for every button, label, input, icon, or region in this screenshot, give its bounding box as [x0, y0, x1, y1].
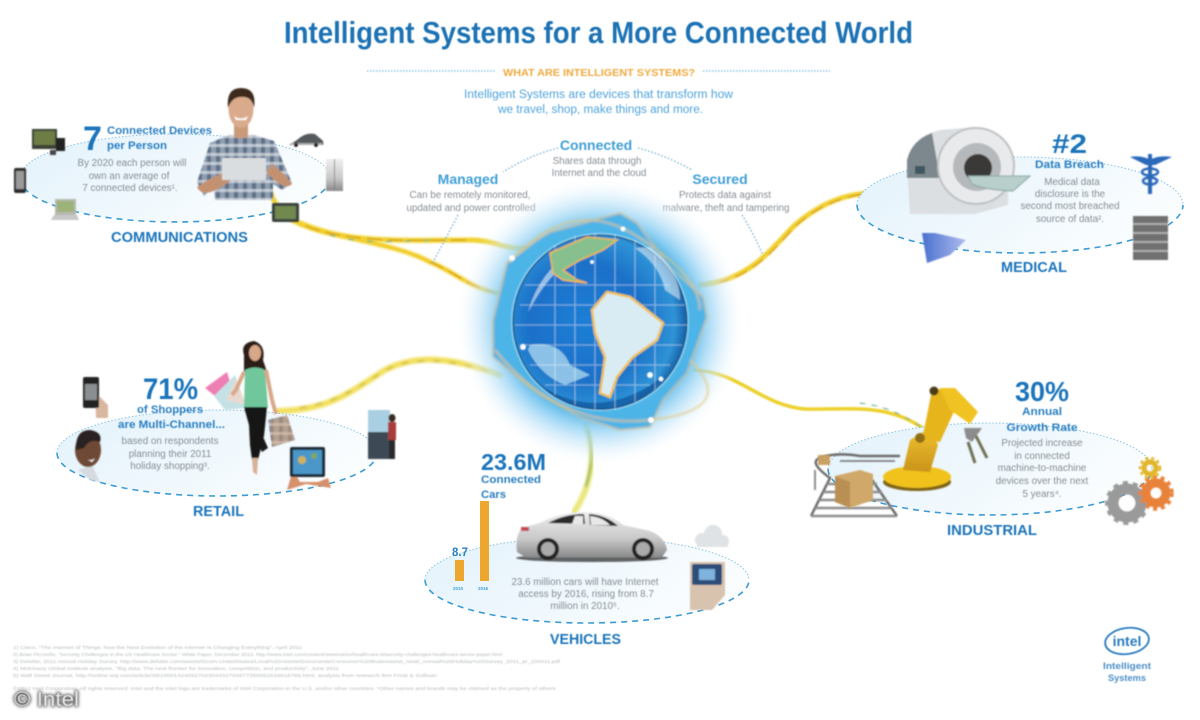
bar chart: connected cars	[452, 501, 489, 591]
text: industrial body	[996, 438, 1089, 500]
text: vehicles body: million in 2010⁵.	[550, 601, 620, 612]
globe outer bands	[493, 213, 708, 430]
feature: connected: Shares data through	[553, 156, 641, 167]
stat: 30 percent: 30%	[1015, 376, 1069, 407]
panel: managed connected secured	[406, 137, 789, 264]
label: of shoppers are multi-channel: are Multi-Channel...	[118, 419, 225, 431]
panel: medical	[857, 127, 1183, 276]
heading: industrial: INDUSTRIAL	[947, 523, 1037, 539]
stat: 7 connected devices: 7	[83, 120, 102, 158]
feature: secured: Protects data against	[679, 190, 771, 201]
feature: connected	[552, 137, 646, 179]
label: connected devices per person	[107, 125, 212, 152]
stat: 71 percent: 71%	[143, 373, 198, 406]
globe grid lines	[515, 234, 688, 410]
label: connected devices per person: Connected Devices	[107, 125, 212, 137]
icon: server stack	[1133, 216, 1168, 260]
text: retail body: based on respondents	[122, 436, 219, 447]
icon: laptop	[51, 199, 79, 220]
icon: phone in hand	[83, 377, 108, 418]
text: communications body: By 2020 each person will	[78, 158, 186, 169]
text: vehicles body: 23.6 million cars will have Internet	[511, 577, 659, 588]
text: communications body: 7 connected devices¹.	[82, 183, 178, 194]
bar: 2010	[455, 560, 464, 581]
panel: communications	[14, 88, 525, 293]
globe	[455, 177, 745, 467]
footnotes: ©2012 Intel Corporation. All rights reserved. Intel and the Intel logo are trademarks of Intel Corporation in the U.S. and/or other countries. *Other names and brands may be claimed as the property of others.	[13, 685, 557, 691]
text: medical body: disclosure is the	[1035, 189, 1106, 200]
feature: managed: Can be remotely monitored,	[410, 190, 530, 201]
icon: tablet device	[272, 203, 299, 222]
text: industrial body: Projected increase	[1001, 438, 1083, 449]
label: of shoppers are multi-channel: of Shoppers	[137, 404, 203, 416]
text: vehicles body: access by 2016, rising from 8.7	[518, 589, 654, 600]
person: man with tablet	[197, 88, 292, 200]
feature: managed	[406, 171, 536, 214]
footnotes	[13, 645, 561, 691]
title: Intelligent Systems for a More Connected World	[284, 15, 913, 50]
footnotes: 2) Brian Piccirello, "Security Challenges in the US Healthcare Sector," White Paper, December 2012. http://www.intel.com/content/www/us/en/healthcare-it/security-challenges-healthcare-sector-paper.html	[13, 652, 502, 657]
intro: what are intelligent systems: we travel, shop, make things and more.	[497, 104, 703, 116]
label: data breach: Data Breach	[1035, 159, 1104, 171]
heading: communications: COMMUNICATIONS	[111, 230, 248, 246]
icon: car small	[289, 134, 323, 147]
feature: secured: malware, theft and tampering	[663, 203, 789, 214]
text: communications body	[78, 158, 186, 194]
watermark: copyright intel: © Intel	[14, 689, 79, 711]
ribbon: vehicles to globe	[574, 425, 591, 512]
icon: robot arm	[883, 386, 987, 491]
ribbon: medical to globe	[700, 192, 905, 285]
value: 8.7: 8.7	[452, 545, 468, 559]
stat: number 2: #2	[1052, 129, 1087, 159]
icon: caduceus	[1130, 154, 1172, 194]
feature: managed: Managed	[438, 171, 498, 187]
ribbon: retail to globe	[278, 360, 500, 411]
intro: what are intelligent systems	[367, 67, 830, 116]
heading: medical: MEDICAL	[1001, 260, 1067, 276]
ribbon: industrial to globe	[694, 370, 928, 432]
icon: cardboard box	[818, 455, 873, 508]
text: medical body	[1020, 177, 1120, 225]
icon: gears	[1107, 458, 1172, 523]
continent: north america	[550, 237, 617, 283]
axis labels	[453, 586, 489, 591]
feature: managed: updated and power controlled	[406, 203, 536, 214]
footnotes: 4) McKinsey Global Institute analysis, "Big data: The next frontier for innovation, competition, and productivity", June 2011	[13, 666, 340, 671]
text: industrial body: 5 years⁴.	[1022, 489, 1062, 500]
bar: 2016	[480, 501, 489, 581]
icon: folder	[922, 233, 966, 263]
text: industrial body: devices over the next	[996, 476, 1089, 487]
text: industrial body: in connected	[1014, 451, 1070, 462]
label: connected cars: Connected	[481, 474, 541, 486]
text: medical body: second most breached	[1020, 201, 1120, 212]
ellipse: retail	[57, 410, 377, 496]
heading: vehicles: VEHICLES	[550, 632, 621, 648]
text: retail body: planning their 2011	[129, 449, 211, 460]
heading: retail: RETAIL	[193, 504, 244, 520]
footnotes: 3) Deloitte, 2011 Annual Holiday Survey. http://www.deloitte.com/assets/Dcom-UnitedStates/Local%20Assets/Documents/Consumer%20Business/us_retail_Annual%20Holiday%20Survey_2011_pr_100411.pdf	[13, 659, 561, 664]
continent: south america	[592, 292, 663, 397]
panel: vehicles	[425, 449, 749, 648]
ellipse: vehicles	[425, 537, 749, 623]
logo: intel intelligent systems: intel	[1113, 633, 1141, 649]
text: retail body	[122, 436, 219, 472]
label: annual growth rate: Growth Rate	[1006, 422, 1078, 434]
feature: secured	[663, 171, 789, 214]
icon: digital kiosk	[368, 410, 396, 459]
label: connected cars: Cars	[481, 489, 506, 501]
intro: what are intelligent systems: WHAT ARE INTELLIGENT SYSTEMS?	[503, 67, 695, 79]
ribbon: communications to globe	[270, 192, 525, 293]
icon: silver car	[516, 512, 668, 562]
globe sparkles	[509, 226, 664, 423]
logo: intel intelligent systems: Intelligent	[1103, 661, 1151, 671]
text: retail body: holiday shopping³.	[130, 461, 210, 472]
ellipse: industrial	[828, 423, 1152, 515]
panel: retail	[57, 341, 396, 520]
text: medical body: Medical data	[1044, 177, 1100, 188]
icon: conveyor belt	[811, 454, 900, 516]
label: annual growth rate	[1006, 406, 1078, 434]
icon: television	[32, 129, 65, 155]
globe halo	[455, 177, 745, 467]
icon: mri scanner	[907, 127, 1030, 214]
logo: intel intelligent systems: Systems	[1108, 673, 1146, 683]
label: of shoppers are multi-channel	[118, 404, 225, 431]
label: annual growth rate: Annual	[1022, 406, 1062, 418]
logo: intel intelligent systems	[1103, 625, 1151, 683]
panel: industrial	[811, 376, 1172, 539]
watermark: copyright intel: © Intel	[14, 689, 79, 711]
feature: secured: Secured	[692, 171, 748, 187]
icon: in-car screen	[690, 562, 725, 610]
text: industrial body: machine-to-machine	[998, 463, 1087, 474]
person: woman shopper	[205, 341, 295, 475]
footnotes: 5) Wall Street Journal, http://online.wsj.com/article/SB10001424052702304432704577350052534616786.html, analysis from research firm Frost & Sullivan	[13, 673, 438, 678]
ellipse: communications	[20, 134, 330, 222]
axis labels: 2016	[478, 586, 489, 591]
icon: cloud	[695, 525, 729, 547]
text: communications body: own an average of	[89, 171, 170, 182]
axis labels: 2010	[453, 586, 464, 591]
stat: 23.6M: 23.6M	[481, 449, 546, 475]
ellipse: medical	[857, 157, 1183, 253]
footnotes: 1) Cisco, "The Internet of Things: how the Next Evolution of the Internet Is Changing Everything", April 2011	[13, 645, 303, 650]
label: connected devices per person: per Person	[107, 140, 167, 152]
feature: connected: Connected	[560, 137, 632, 153]
icon: tablet with hands	[287, 447, 331, 490]
globe sphere	[511, 233, 689, 411]
text: medical body: source of data².	[1036, 214, 1104, 225]
label: connected cars	[481, 474, 541, 501]
icon: refrigerator	[326, 159, 343, 191]
icon: smartphone	[14, 168, 26, 193]
intro: what are intelligent systems: Intelligent Systems are devices that transform how	[464, 89, 734, 101]
icon: customer service agent	[75, 430, 101, 482]
feature: connected: Internet and the cloud	[552, 168, 646, 179]
text: vehicles body	[511, 577, 659, 612]
